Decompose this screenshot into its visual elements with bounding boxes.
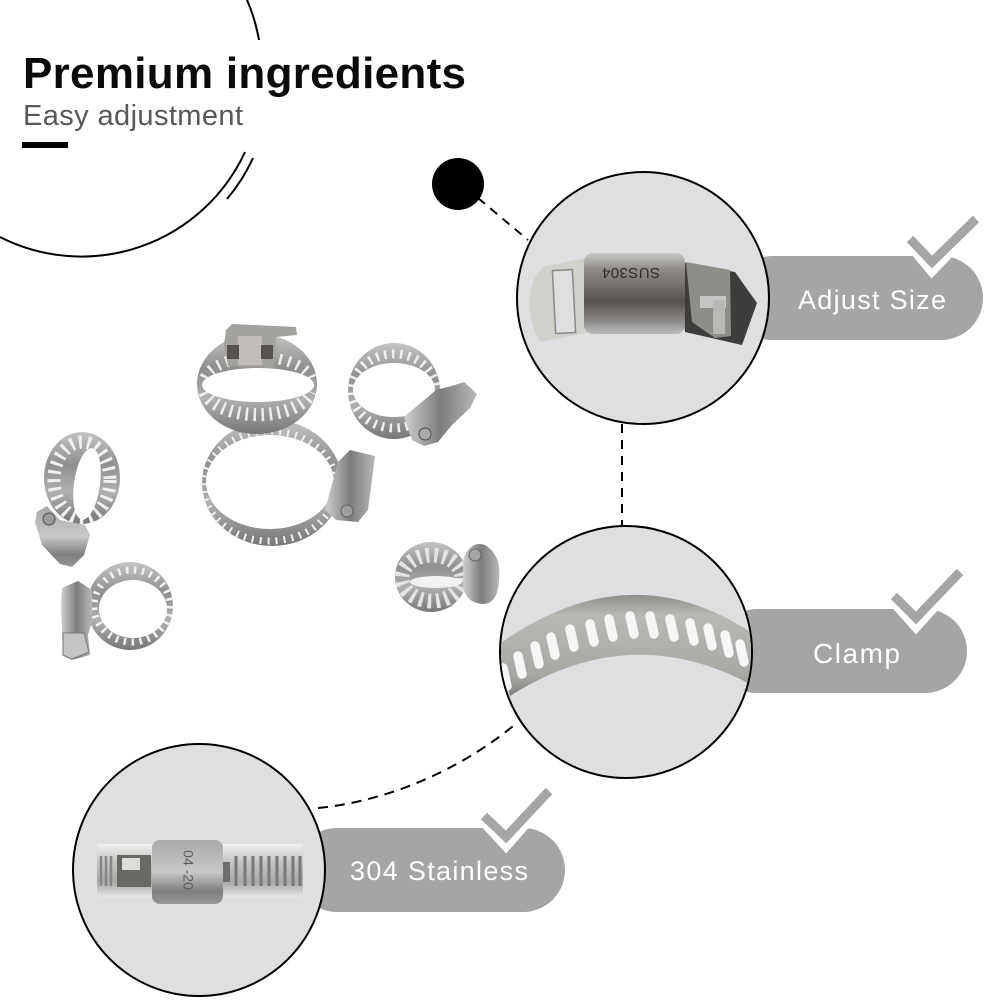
decorative top-left arcs (0, 0, 259, 257)
title underline bar (22, 142, 68, 148)
black start dot (432, 158, 484, 210)
panel: clamp (498, 526, 967, 778)
detail circle: clamp (498, 526, 755, 778)
label pill: clamp (715, 609, 967, 693)
detail circle: 304 stainless (73, 744, 325, 996)
icon: check mark clamp (894, 572, 960, 621)
clamp: top right ring (348, 343, 477, 446)
dashed connector: clamp to 304 stainless (318, 722, 518, 808)
icon: check mark 304 stainless (484, 791, 549, 840)
label pill: adjust size (730, 256, 983, 340)
clamp: large ring (202, 420, 375, 546)
clamp: right small ring (395, 542, 499, 612)
clamp: left upper ring (35, 432, 120, 567)
label text: clamp: Clamp (813, 638, 900, 669)
title: Premium ingredients (23, 49, 466, 98)
label text: 304 stainless: 304 Stainless (350, 856, 528, 886)
clamp: left lower ring (61, 562, 173, 660)
dashed connector: dot to adjust size (478, 198, 528, 240)
dashed connector: adjust size to clamp (621, 424, 623, 525)
stamped text: 04-20: 04 -20 (180, 850, 196, 890)
panel: adjust size (517, 172, 983, 424)
product photo: six hose clamps (35, 324, 499, 660)
stamped text: SUS304: SUS304 (602, 264, 660, 281)
subtitle: Easy adjustment (23, 100, 243, 132)
detail circle: adjust size (517, 172, 769, 424)
icon: check mark adjust size (910, 219, 976, 265)
clamp: top centre ring (197, 324, 317, 434)
label pill: 304 stainless (295, 828, 565, 912)
panel: 304 stainless (73, 744, 565, 996)
label text: adjust size: Adjust Size (798, 285, 946, 315)
